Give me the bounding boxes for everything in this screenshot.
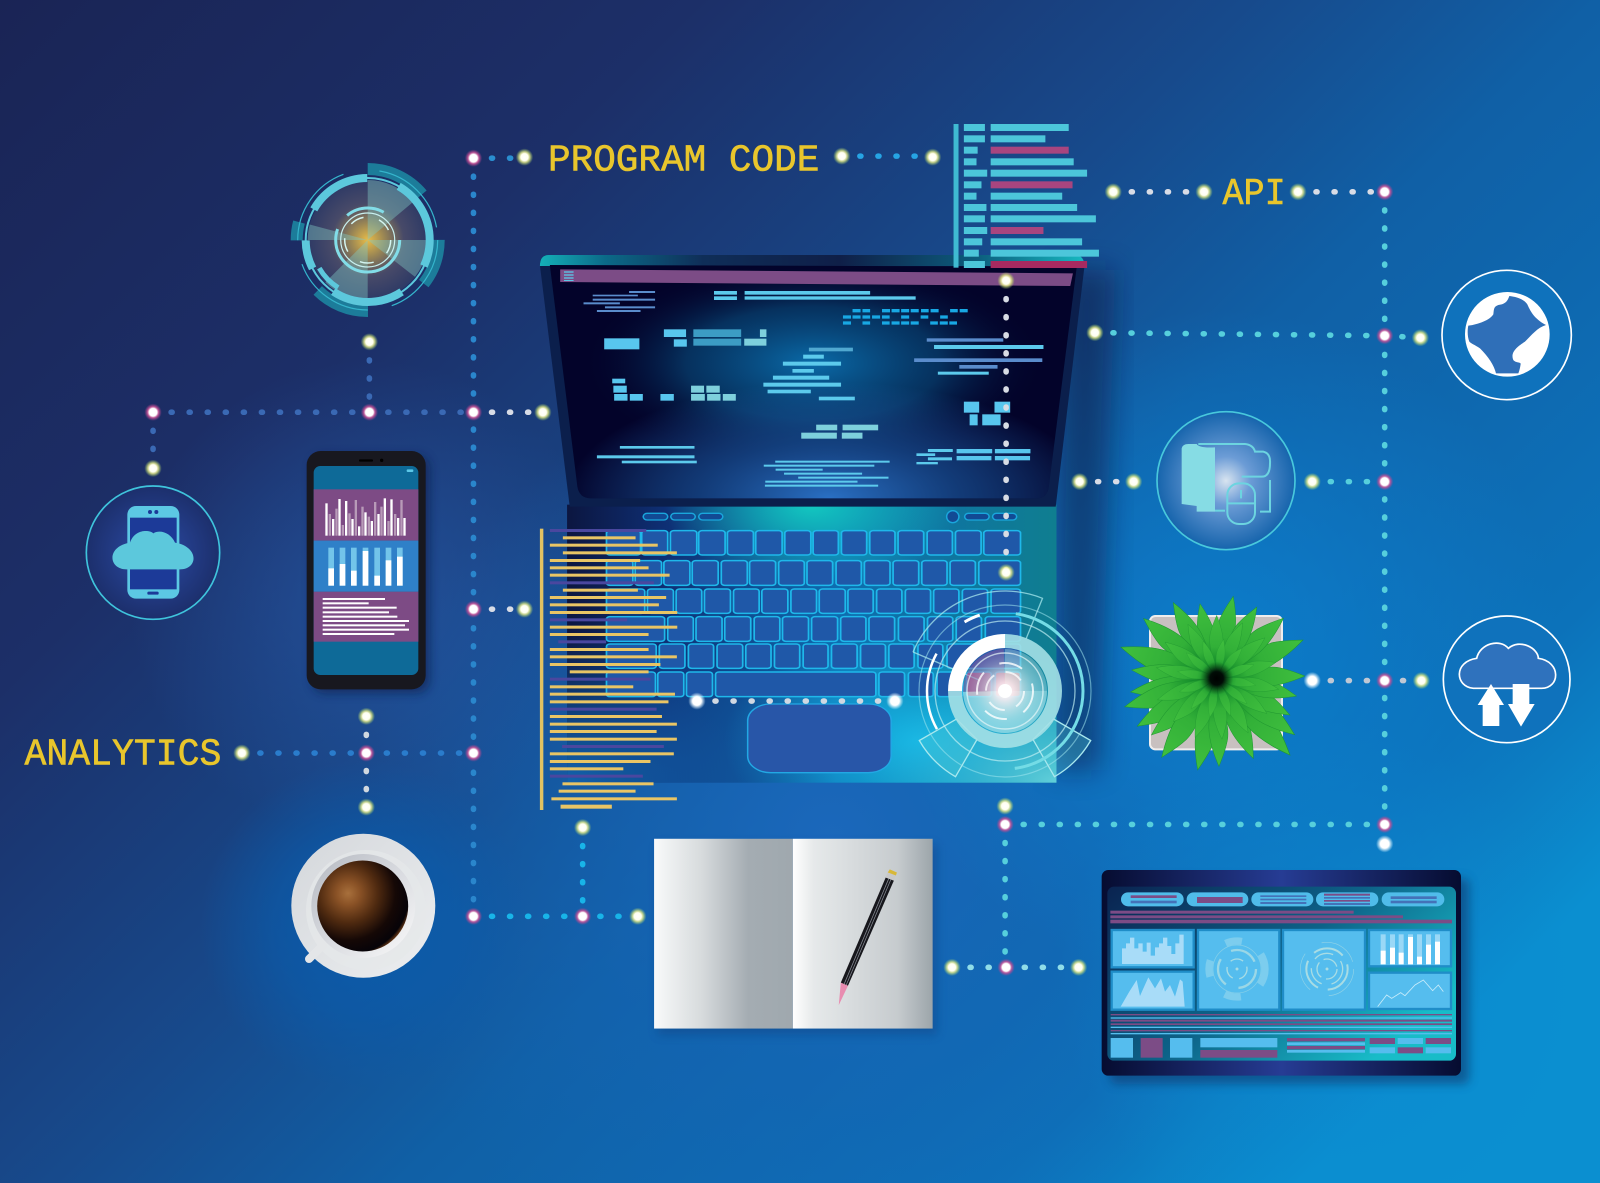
cup handle <box>309 945 323 959</box>
plant <box>1117 594 1307 772</box>
HUD circle top left <box>297 169 439 311</box>
dashboard header lines <box>1110 911 1452 923</box>
saucer <box>291 834 435 978</box>
screen small cells <box>843 309 968 325</box>
pencil <box>839 869 897 1005</box>
icon: phone with cloud <box>86 486 220 619</box>
phone bar chart 1 <box>329 500 403 536</box>
dashboard detail lines <box>1111 1014 1452 1031</box>
heading: analytics: ANALYTICS <box>24 734 221 776</box>
area chart 1 <box>1122 935 1184 964</box>
area chart 2 <box>1121 977 1185 1007</box>
screen data blocks <box>604 329 1030 460</box>
phone bar chart 2 <box>328 548 403 586</box>
screen title bar <box>560 269 1073 286</box>
dashboard tablet <box>1102 870 1469 1084</box>
laptop <box>540 255 1115 783</box>
HUD wedges <box>338 210 398 270</box>
icon: cloud upload and download <box>1443 616 1570 743</box>
HUD outlined sectors <box>913 591 1091 777</box>
notebook <box>654 839 937 1035</box>
phone <box>307 451 430 693</box>
connector network <box>24 140 1430 976</box>
dashboard footer blocks <box>1111 1038 1451 1058</box>
yellow code panel <box>540 529 677 810</box>
dashboard bar chart <box>1381 934 1440 964</box>
phone screen <box>314 466 418 675</box>
cup rim <box>311 854 415 958</box>
keyboard keys <box>606 531 1021 697</box>
HUD circle on keyboard <box>913 591 1091 777</box>
screen code lines <box>584 291 1042 369</box>
connector lines <box>153 156 1421 967</box>
icon: globe <box>1442 270 1571 400</box>
connector nodes <box>144 147 1430 976</box>
HUD ring <box>306 178 430 302</box>
dashboard line chart <box>1378 980 1443 1007</box>
radar 1 <box>1209 941 1265 997</box>
laptop keyboard deck <box>567 505 1056 783</box>
plant leaves <box>1117 594 1307 772</box>
HUD inner wedges <box>984 670 1026 712</box>
touchpad <box>748 704 891 773</box>
plant pot <box>1150 616 1282 749</box>
HUD thick ring <box>955 641 1055 741</box>
laptop screen <box>550 265 1077 498</box>
heading: api: API <box>1222 174 1286 216</box>
coffee cup <box>291 834 435 978</box>
dashboard chart panels <box>1112 930 1451 1010</box>
icon: folder and mouse circle <box>1157 412 1295 550</box>
laptop shadow <box>1052 270 1115 770</box>
HUD outer sectors <box>297 169 439 311</box>
keyboard top buttons <box>643 511 1017 523</box>
code panel top right <box>954 124 1099 268</box>
phone text lines <box>323 598 409 635</box>
dashboard tabs <box>1121 892 1444 906</box>
radar 2 <box>1300 942 1354 996</box>
laptop lid <box>540 255 1084 507</box>
heading: program code: PROGRAM CODE <box>548 140 819 182</box>
coffee <box>317 860 408 952</box>
phone shadow <box>312 455 430 693</box>
